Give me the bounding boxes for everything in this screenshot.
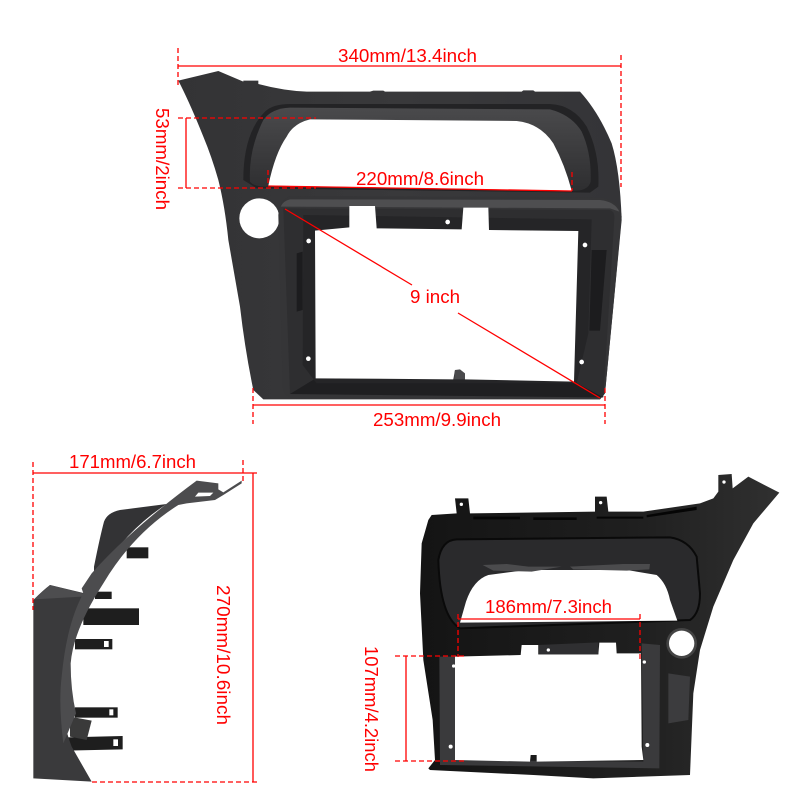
- rear window opening: [460, 570, 677, 623]
- label: 107mm: 107mm/4.2inch: [361, 646, 381, 772]
- dimension: overall width: [178, 46, 621, 187]
- screen surround frame: [278, 196, 622, 399]
- label: 340mm: 340mm/13.4inch: [338, 46, 477, 66]
- label: 220mm: 220mm/8.6inch: [356, 169, 484, 189]
- dimension: upper window height: [152, 108, 316, 210]
- front panel body: [178, 71, 622, 399]
- dimension: rear screen height: [361, 646, 464, 772]
- screen frame inner: [283, 208, 614, 397]
- top slots: [473, 507, 697, 520]
- dimension: depth: [33, 452, 247, 610]
- rear window ring: [438, 537, 700, 628]
- screw holes: [449, 480, 726, 749]
- screen opening: [455, 643, 643, 762]
- surround top rim: [281, 199, 619, 212]
- curved side strip: [60, 481, 242, 743]
- mounting rails: [303, 215, 592, 383]
- dimension: frame bottom width: [253, 388, 605, 430]
- side slots: [297, 250, 607, 331]
- upper window opening: [268, 119, 572, 191]
- dimension: rear screen width: [458, 597, 640, 660]
- label: 53mm: 53mm/2inch: [152, 108, 172, 210]
- retaining tab: [454, 369, 465, 379]
- label: 171mm: 171mm/6.7inch: [69, 452, 196, 472]
- rear view of dash frame: [420, 474, 779, 778]
- frame floor shadow: [290, 378, 603, 397]
- lower frame rails: [439, 643, 660, 768]
- dimension: side height: [92, 473, 257, 782]
- label: 186mm: 186mm/7.3inch: [485, 597, 612, 617]
- rear panel body: [420, 474, 779, 778]
- front view of dash frame: [178, 71, 622, 399]
- screen opening: [315, 206, 578, 382]
- clip row: [483, 564, 650, 572]
- mounting arms: [67, 547, 148, 751]
- label: 9 inch: 9 inch: [410, 287, 460, 307]
- dimension: screen diagonal: [285, 209, 600, 398]
- label: 253mm: 253mm/9.9inch: [373, 410, 501, 430]
- arm holes: [104, 641, 118, 746]
- reflective highlight: [668, 673, 690, 723]
- screw holes: [306, 220, 587, 364]
- textured hood: [94, 504, 167, 576]
- lower body: [33, 585, 92, 782]
- gauge hole ring: [666, 628, 697, 659]
- dimension: upper window width: [268, 169, 572, 191]
- bracket cutouts: [195, 493, 213, 497]
- top face of lower body: [34, 585, 85, 599]
- upper window lip: [250, 108, 591, 191]
- side view of dash frame: [33, 481, 242, 782]
- centre bracket: [538, 642, 598, 654]
- upper recess shadow: [243, 104, 599, 193]
- label: 270mm: 270mm/10.6inch: [213, 585, 233, 725]
- gauge hole: [239, 198, 279, 238]
- gauge hole: [669, 631, 694, 656]
